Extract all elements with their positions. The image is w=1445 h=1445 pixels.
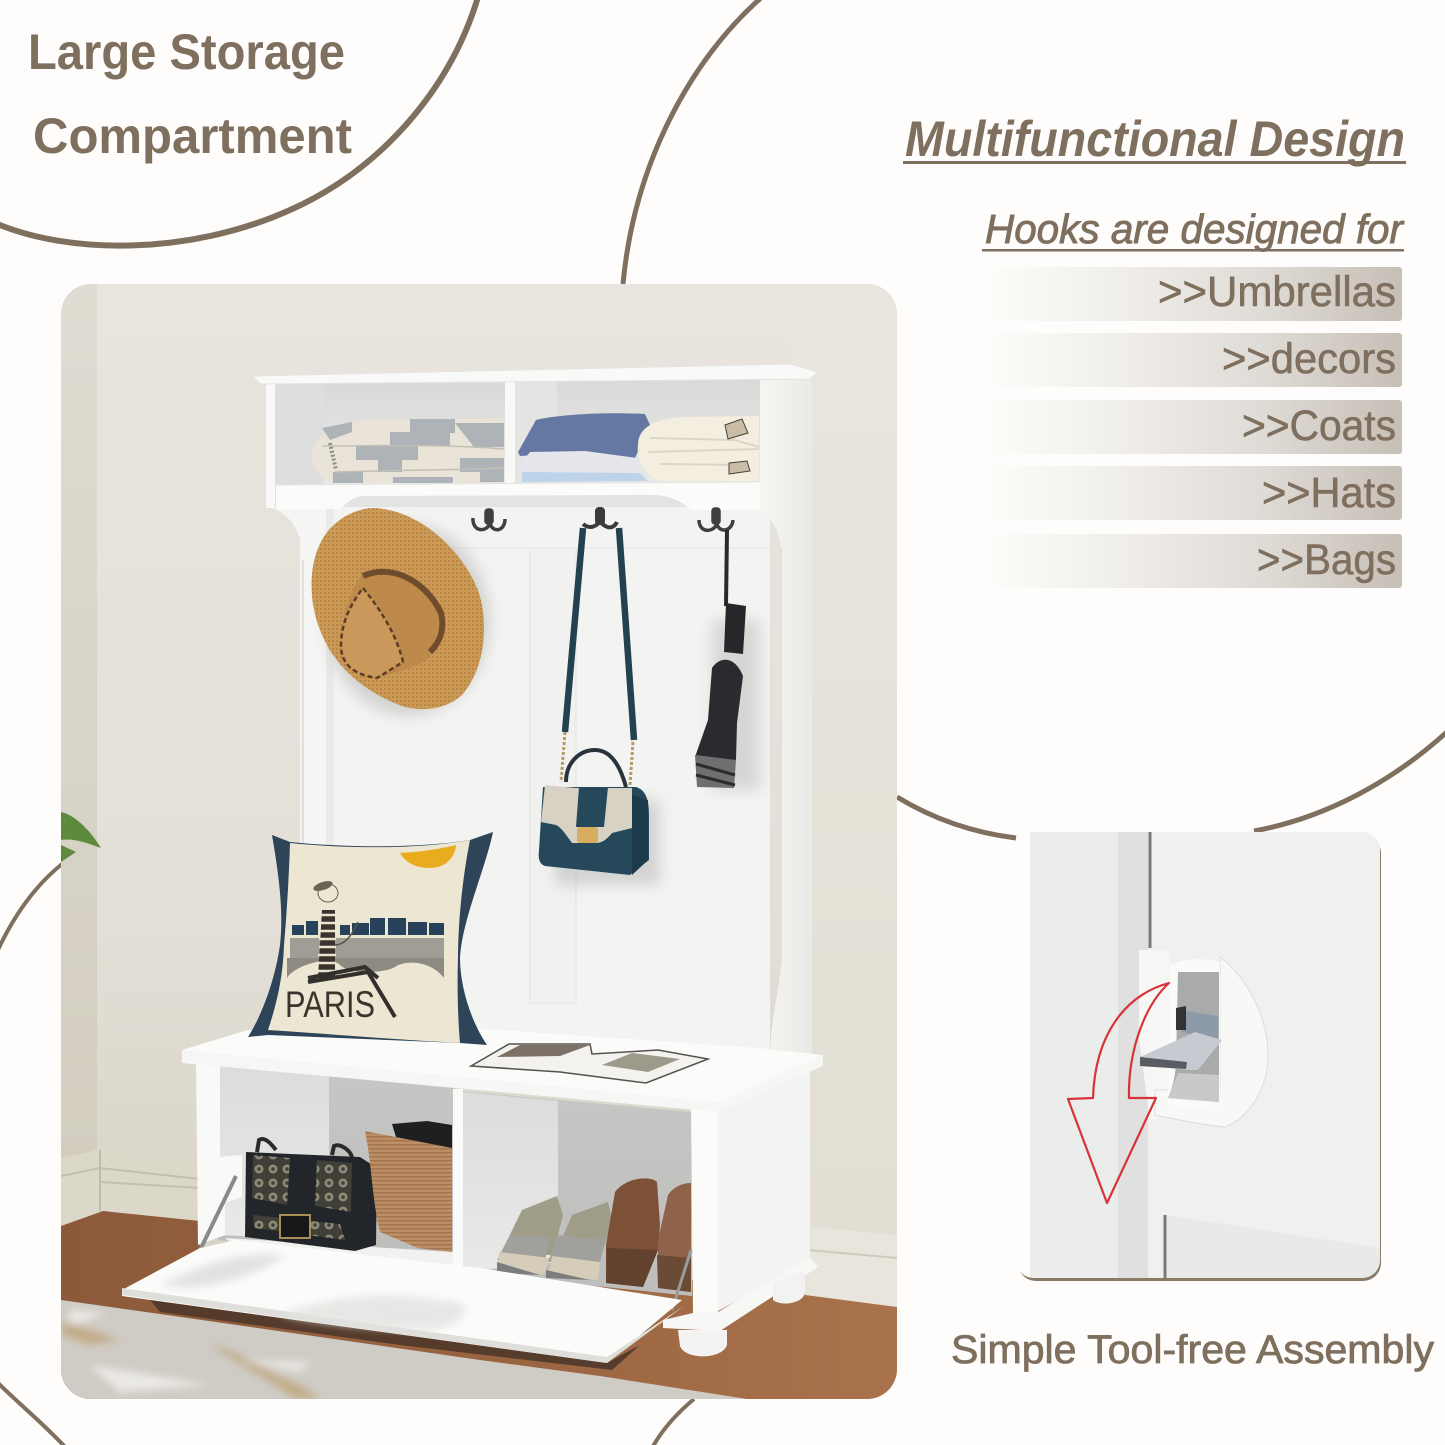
shadow under umbrella — [712, 620, 760, 790]
fold-down door — [122, 1240, 684, 1363]
right front stile — [691, 1108, 718, 1313]
woven basket — [365, 1121, 452, 1252]
list item: Hats: >>Hats — [1262, 469, 1396, 517]
icon: straw hat — [312, 508, 484, 709]
door seam — [1150, 832, 1165, 1278]
list item: Coats: >>Coats — [1242, 402, 1396, 450]
list item: Umbrellas: >>Umbrellas — [1158, 268, 1396, 316]
plant leaf — [61, 812, 101, 862]
list item: Bags: >>Bags — [1257, 536, 1396, 584]
folded blanket — [312, 418, 504, 483]
caption: Simple Tool-free Assembly: Simple Tool-free Assembly — [951, 1328, 1434, 1372]
side panel — [716, 1060, 810, 1312]
flap hinge left — [200, 1176, 236, 1250]
blanket fringe — [330, 443, 336, 470]
icon: coat hook left — [473, 510, 505, 530]
baseboards — [61, 1150, 897, 1307]
shadow under door — [150, 1300, 640, 1370]
heading: Large Storage Compartment: Large Storage — [28, 24, 345, 80]
right wall — [810, 1132, 897, 1235]
brown boot second — [657, 1183, 691, 1292]
icon: coat hook centre — [583, 509, 617, 527]
sneaker left — [497, 1196, 563, 1275]
folded white shirt — [517, 451, 640, 474]
bridge facade — [290, 938, 444, 958]
subheading: Hooks are designed for: Hooks are designed for — [985, 206, 1405, 252]
icon: folded umbrella — [695, 530, 746, 788]
figure — [318, 910, 335, 978]
foot right — [773, 1270, 805, 1304]
list item: Hats — [985, 466, 1402, 520]
shadow under handbag — [555, 800, 660, 885]
bag strap — [565, 528, 634, 740]
centre divider — [453, 1089, 463, 1271]
side wall — [61, 284, 97, 1160]
hinge cam — [1139, 950, 1268, 1127]
bench lower section — [182, 1028, 823, 1356]
icon: red curved arrow — [1068, 983, 1169, 1203]
panel: hinge detail shadow — [1018, 835, 1381, 1281]
lower door — [1153, 1213, 1380, 1278]
icon: coat hook right — [699, 509, 733, 530]
open book — [471, 1044, 708, 1083]
sun — [400, 845, 456, 868]
decorative arc: top centre — [623, 0, 762, 284]
right post — [760, 380, 812, 1054]
folded pale blue shirt — [522, 472, 648, 482]
frame strip — [1118, 832, 1148, 1278]
left interior — [218, 1076, 455, 1252]
wall — [61, 284, 897, 1399]
heading: Large Storage Compartment — [28, 24, 352, 164]
decorative arc: bottom left — [0, 1382, 66, 1445]
heading: Large Storage Compartment: Compartment — [33, 108, 352, 164]
left front stile — [196, 1062, 242, 1245]
cornice — [253, 364, 818, 384]
back panel boards — [530, 548, 576, 1003]
icon: handbag — [539, 750, 649, 875]
list item: Coats — [985, 400, 1402, 454]
rooftops — [292, 918, 444, 935]
list item: Bags — [985, 534, 1402, 588]
plinth — [663, 1257, 818, 1331]
shelf board — [276, 482, 760, 510]
bridge arches — [287, 958, 444, 978]
seat — [182, 1028, 823, 1104]
pillow body — [248, 832, 493, 1045]
leaf shadows on door — [160, 1254, 285, 1288]
wood floor — [61, 1211, 897, 1399]
list item: decors: >>decors — [1222, 335, 1396, 383]
white margin — [1016, 832, 1030, 1278]
handbag in lower compartment — [245, 1139, 377, 1251]
panel: hall tree product photo — [61, 284, 897, 1399]
panel: tool-free hinge detail photo — [1016, 832, 1380, 1278]
flap hinge right — [672, 1250, 691, 1310]
pillow — [248, 832, 493, 1045]
shadow under hat — [326, 524, 490, 716]
cubby interiors — [324, 382, 505, 484]
left board — [1030, 832, 1118, 1278]
left post — [272, 508, 326, 845]
door upper — [1153, 832, 1380, 1248]
folded blue shirt — [518, 413, 650, 458]
sneaker right — [546, 1202, 612, 1280]
decorative arc: right middle — [897, 731, 1445, 838]
list item: Umbrellas — [985, 267, 1402, 321]
decorative arc: left middle — [0, 864, 62, 952]
strap chains — [561, 732, 633, 785]
folded cream towel — [638, 416, 759, 481]
rug — [61, 1300, 747, 1399]
decorative arc: bottom centre — [652, 1399, 694, 1445]
back panel — [300, 495, 770, 1060]
compartment floor — [225, 1238, 453, 1265]
brown boot — [606, 1178, 660, 1287]
pillow text: PARIS — [285, 984, 375, 1025]
hall tree upper section — [253, 364, 818, 1072]
foot front — [678, 1330, 727, 1356]
heading: Multifunctional Design: Multifunctional Design — [905, 111, 1405, 167]
decorative arc: top left — [0, 0, 478, 246]
list item: decors — [985, 333, 1402, 387]
right interior — [460, 1091, 692, 1296]
